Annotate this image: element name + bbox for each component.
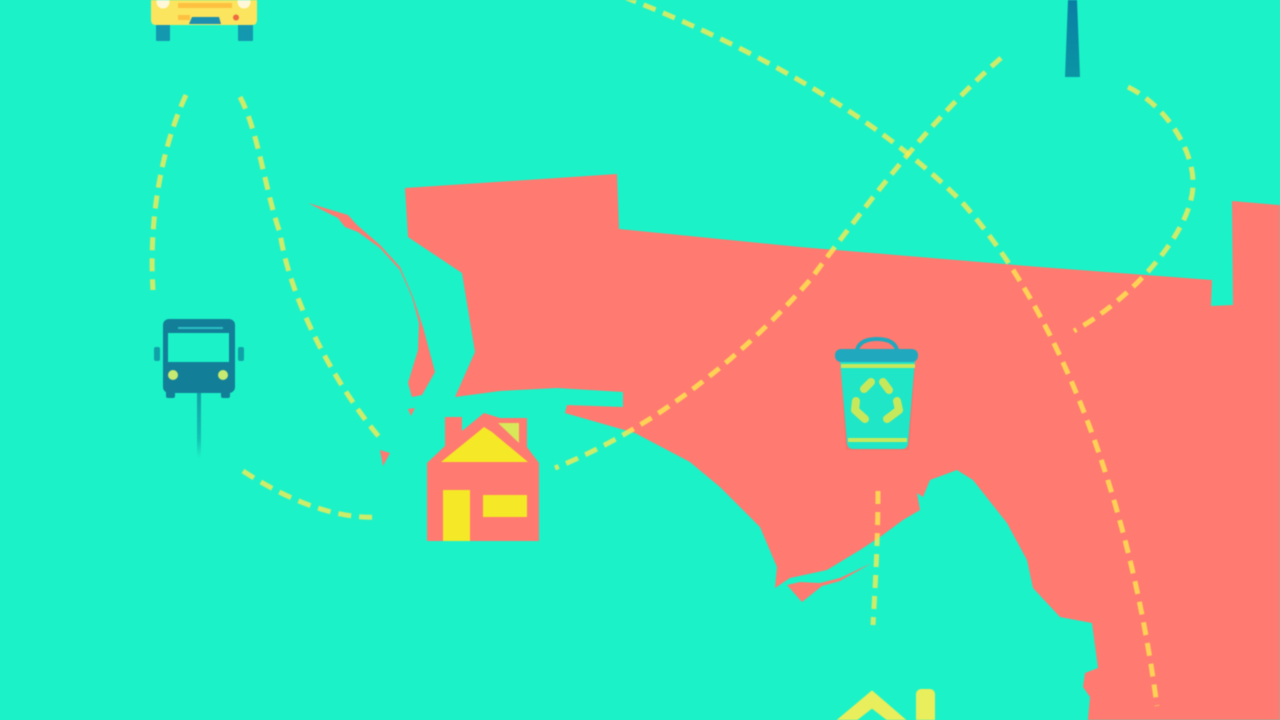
icon: tower (1065, 0, 1080, 77)
southern islet (787, 563, 872, 602)
icon: school bus (151, 0, 257, 41)
dashed route lines (152, 0, 1193, 706)
icon: small house roof (835, 689, 935, 720)
icon: house (427, 413, 539, 541)
peninsula sliver (308, 203, 435, 397)
icon: recycling bin (835, 339, 918, 450)
icon: city bus (154, 319, 244, 458)
small island (380, 450, 390, 466)
map landmass (308, 174, 1280, 720)
icon: recycling arrows (855, 382, 899, 419)
small island (408, 408, 415, 416)
